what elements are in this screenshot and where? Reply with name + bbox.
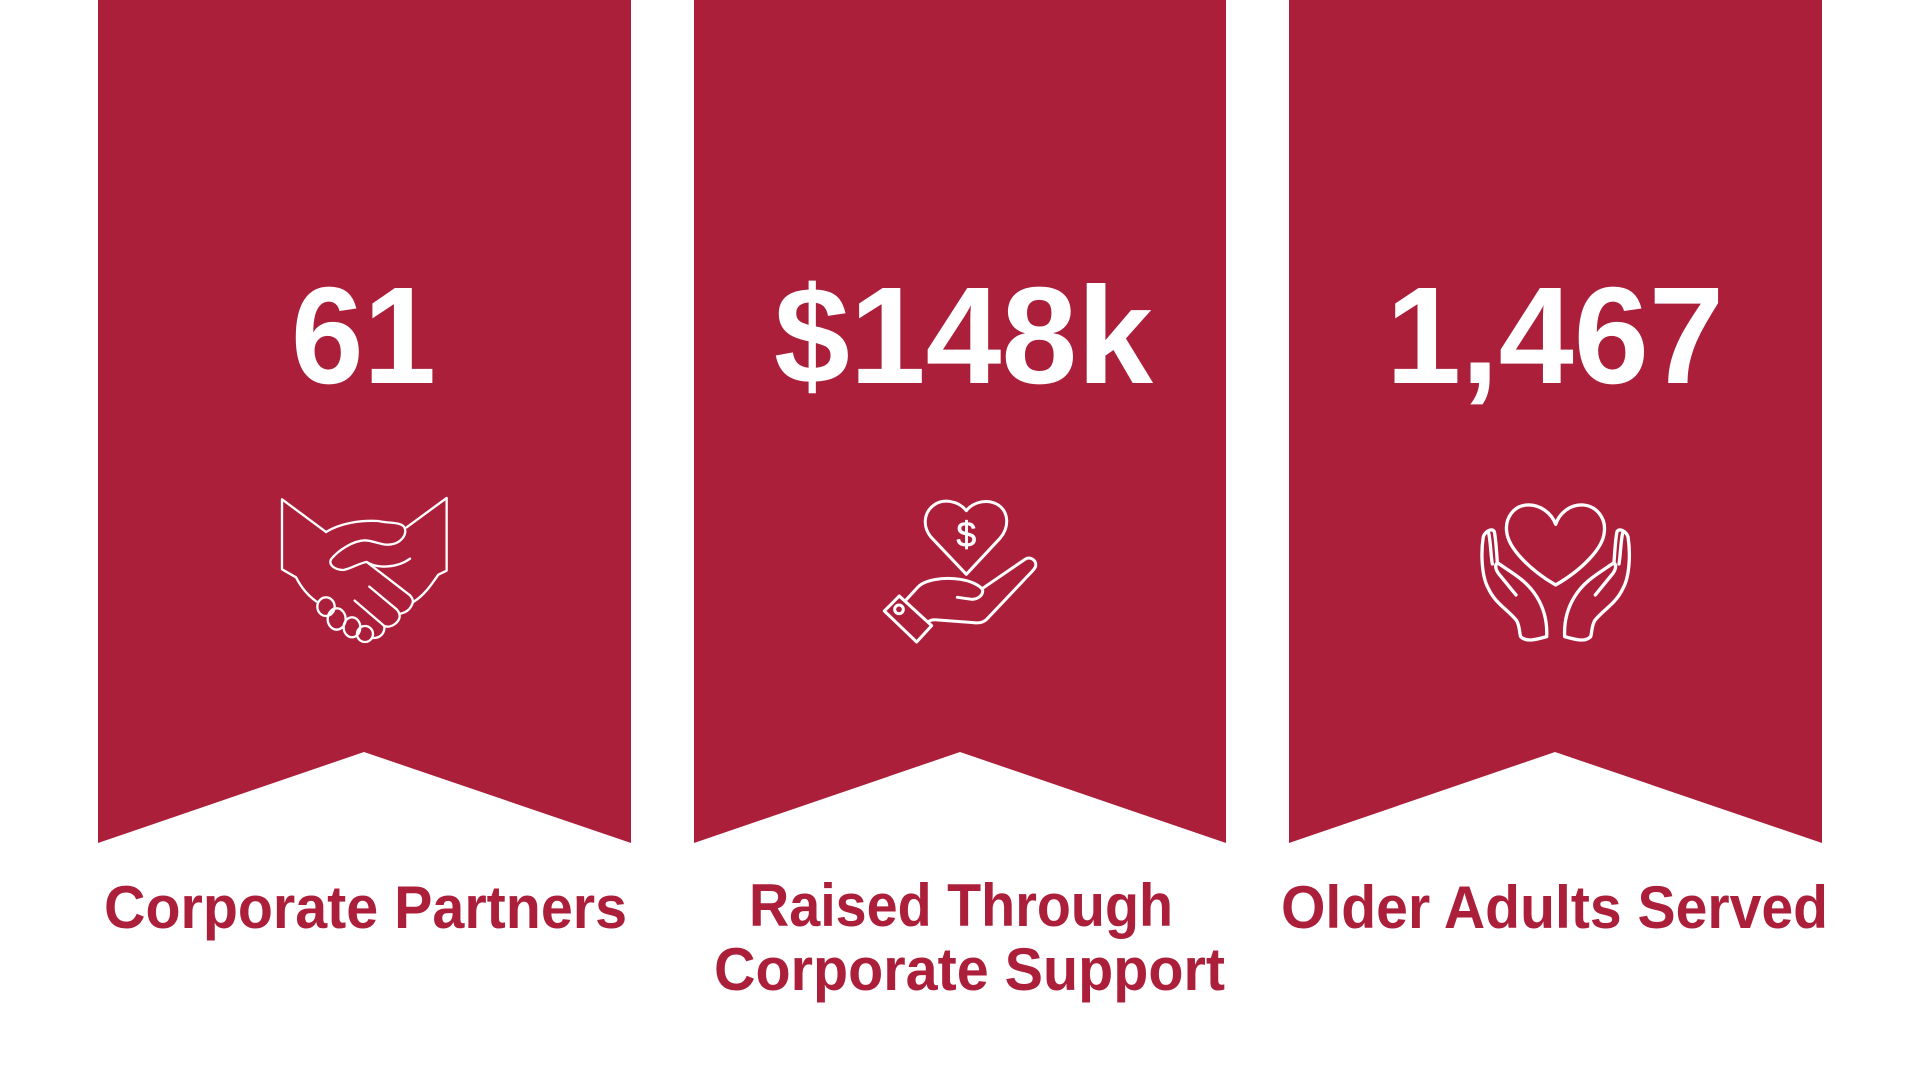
icon: hand holding heart with dollar [884, 501, 1036, 642]
panel: older adults served [1281, 0, 1828, 941]
number: $148k: $148k [774, 259, 1153, 413]
label: raised through corporate support: Raised Through [749, 872, 1173, 939]
panel: raised through corporate support [694, 0, 1226, 1003]
number: 1,467: 1,467 [1386, 259, 1724, 413]
number: 61: 61 [291, 259, 436, 413]
panel: corporate partners [98, 0, 631, 941]
label: corporate partners: Corporate Partners [104, 874, 627, 941]
label: raised through corporate support [714, 872, 1225, 1003]
banner: older adults [1289, 0, 1822, 843]
banner: corporate partners [98, 0, 631, 843]
icon: hand holding heart with dollar: $ [957, 515, 977, 554]
icon: hands holding heart [1482, 505, 1629, 640]
banner: raised [694, 0, 1226, 843]
label: older adults served: Older Adults Served [1281, 874, 1828, 941]
label: raised through corporate support: Corporate Support [714, 936, 1225, 1003]
icon: handshake [282, 498, 447, 642]
